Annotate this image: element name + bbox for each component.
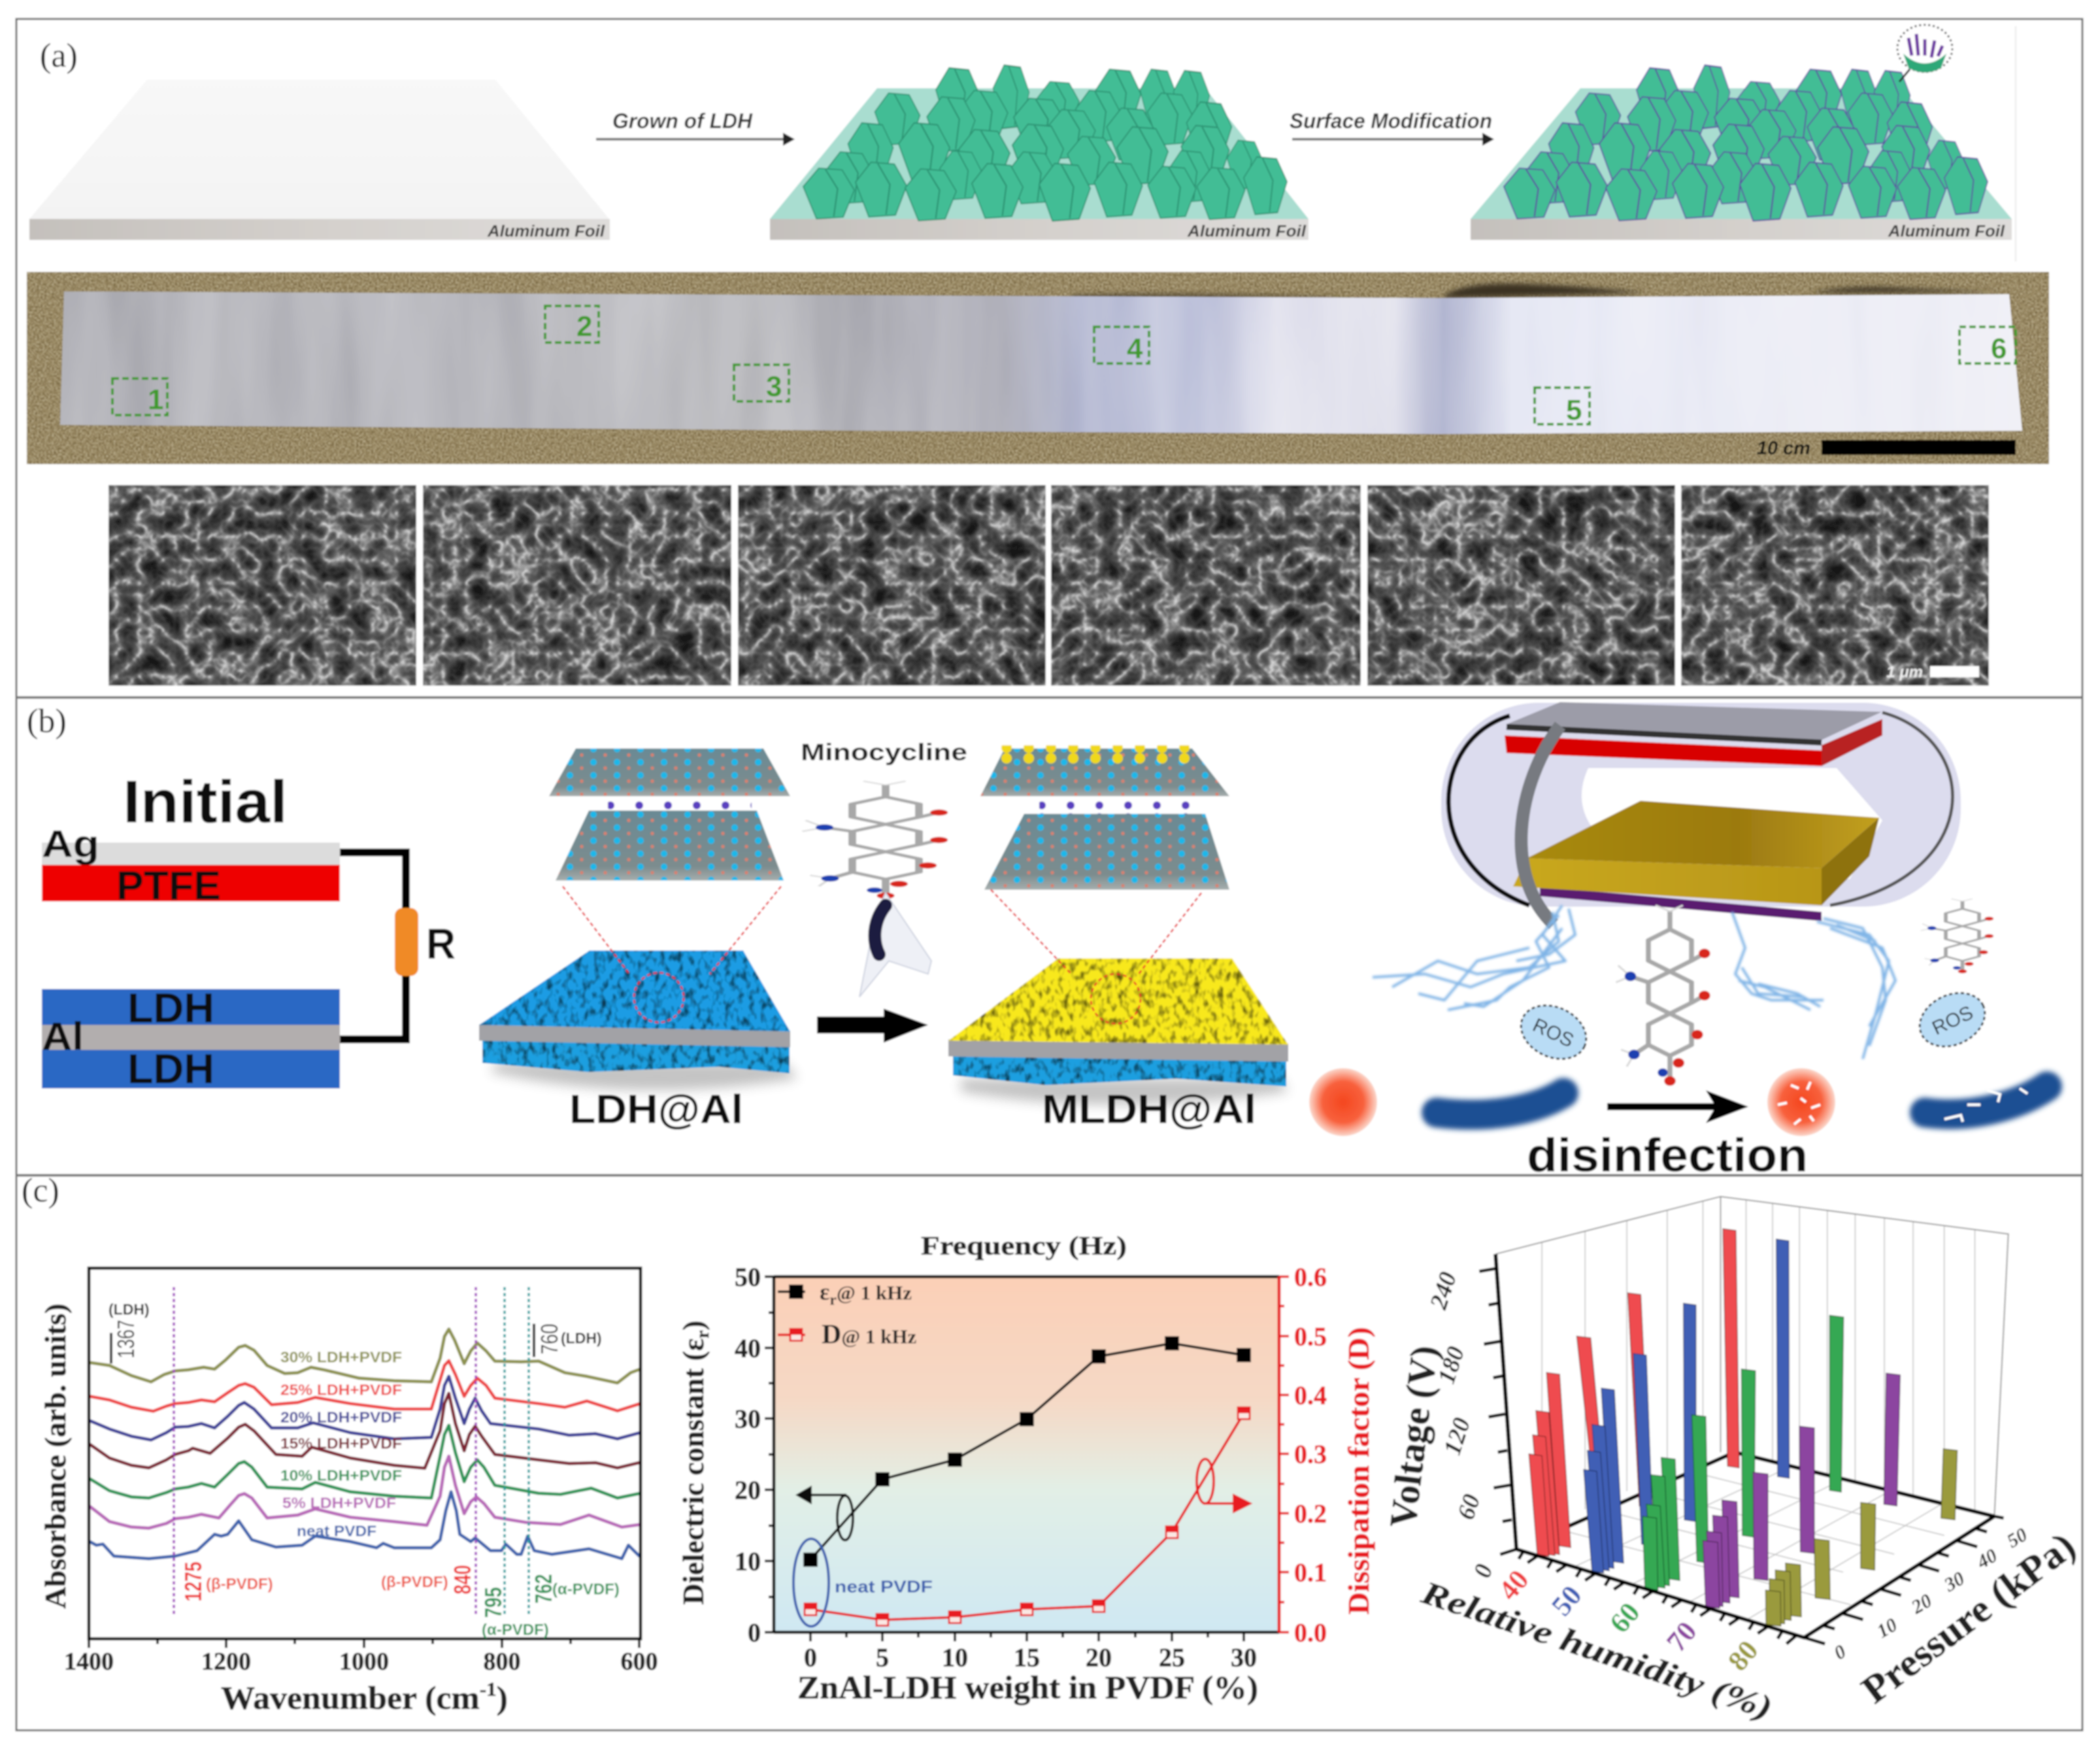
spectra curves [90, 1329, 641, 1558]
central minocycline molecule [1616, 905, 1710, 1086]
panel b: device and disinfection mechanism [27, 702, 2047, 1182]
tick values: 30 [735, 1404, 761, 1434]
sampling box numbers: 1 [148, 384, 163, 416]
right axis tick values: 0.2 [1294, 1499, 1327, 1528]
scale bar 10 cm: 10 cm [1757, 438, 1810, 459]
voltage tick values: 0 [1469, 1561, 1498, 1581]
tick values: 30 [1231, 1643, 1257, 1672]
arrow: grown of LDH: Grown of LDH [612, 109, 753, 133]
gold plate [1513, 801, 1879, 921]
band annotations: 1367 [112, 1320, 139, 1358]
sampling box numbers: 5 [1566, 394, 1582, 426]
voltage tick values [1424, 1269, 1498, 1581]
series labels: 5% LDH+PVDF [282, 1494, 396, 1511]
voltage tick values: 180 [1433, 1343, 1470, 1387]
sampling box 2 [545, 306, 599, 343]
photo: aluminium foil strip on wood [27, 272, 2049, 464]
bars: 40 percent humidity [1529, 1229, 1739, 1556]
ROS bubble right [1911, 983, 1993, 1056]
diagram: triboelectric layer stack and circuit [42, 823, 456, 1092]
right axis tick values: 0.5 [1294, 1322, 1327, 1351]
legend: @ 1 kHz [837, 1281, 912, 1304]
ROS bubble right: ROS [1929, 1002, 1976, 1039]
zoom lines and region [563, 886, 781, 1022]
band annotations: 760 [536, 1324, 563, 1354]
label: LDH at Al: LDH@Al [569, 1087, 743, 1132]
left axis label: r [693, 1330, 713, 1338]
bars: 50 percent humidity [1584, 1239, 1790, 1573]
right axis tick values: 0.4 [1294, 1381, 1327, 1410]
schematic: foil with modified crystals [1471, 26, 2016, 261]
series: dielectric constant [803, 1336, 1251, 1567]
band annotations: (LDH) [561, 1330, 602, 1347]
arrow: surface modification: Surface Modification [1290, 109, 1492, 133]
panel label c: (c) [22, 1172, 59, 1209]
band annotations: (β-PVDF) [206, 1575, 273, 1593]
label: Minocycline: Minocycline [801, 739, 967, 765]
left axis label: Dielectric constant (ε [676, 1335, 710, 1605]
voltage tick values: 120 [1439, 1415, 1476, 1458]
axis labels and tick values [39, 1303, 658, 1716]
axis labels and tick values: ) [497, 1679, 508, 1716]
LDH at Al block [479, 886, 797, 1090]
intact rod bacterium [1437, 1093, 1563, 1115]
minocycline molecule [803, 781, 948, 899]
voltage tick values: 240 [1424, 1269, 1462, 1313]
pressure tick values [1831, 1524, 2031, 1664]
humidity axis label: Relative humidity (%) [1416, 1573, 1777, 1726]
tick values: 0 [804, 1643, 817, 1672]
scale bar 1 micron: 1 μm [1886, 663, 1923, 681]
series labels: 10% LDH+PVDF [280, 1467, 402, 1484]
SEM micrographs [108, 485, 1989, 686]
axis labels and tick values: 1400 [64, 1648, 114, 1675]
sampling box numbers: 3 [766, 371, 782, 403]
ROS bubble left: ROS [1529, 1015, 1577, 1052]
tick values: 20 [1086, 1643, 1112, 1672]
scale bar 1 micron [1886, 663, 1979, 681]
top plate [1505, 702, 1882, 766]
band guide lines [174, 1287, 529, 1614]
panel label a: (a) [40, 37, 78, 75]
tick values: 15 [1014, 1643, 1040, 1672]
arrow: disinfection [1607, 1090, 1748, 1123]
bars: 80 percent humidity [1765, 1449, 1958, 1626]
voltage tick values: 60 [1452, 1491, 1486, 1523]
label: disinfection: disinfection [1527, 1130, 1808, 1182]
series labels: 30% LDH+PVDF [280, 1349, 402, 1366]
chart: FTIR absorbance spectra [39, 1268, 658, 1716]
x axis label: ZnAl-LDH weight in PVDF (%) [797, 1669, 1258, 1705]
diagram: triboelectric layer stack and circuit: R [426, 919, 456, 967]
sampling box 3 [734, 365, 789, 401]
intact coccus [1309, 1068, 1377, 1136]
right axis tick values: 0.6 [1294, 1262, 1327, 1292]
humidity tick values: 60 [1603, 1596, 1646, 1639]
tick values [735, 1262, 1257, 1672]
label: MLDH at Al: MLDH@Al [1042, 1087, 1256, 1132]
sampling box 5 [1535, 388, 1590, 424]
series: dissipation factor [805, 1407, 1250, 1626]
diagram: triboelectric layer stack and circuit: PTFE [116, 864, 221, 909]
chart: 3D bar chart voltage vs humidity and pressure [1381, 1196, 2083, 1726]
panel a: aluminium foil growth and characterisation [27, 25, 2049, 686]
pressure tick values: 20 [1907, 1590, 1935, 1619]
arrow: left axis indicator [798, 1488, 853, 1540]
band annotations: (LDH) [108, 1301, 150, 1318]
callout: neat PVDF [793, 1539, 933, 1626]
diagram: triboelectric layer stack and circuit: LDH [127, 1045, 214, 1092]
series labels [280, 1349, 402, 1539]
tick values: 20 [735, 1475, 761, 1505]
sampling box numbers: 4 [1127, 333, 1143, 365]
bars: 60 percent humidity [1642, 1315, 1844, 1590]
heading: Initial: Initial [123, 769, 288, 835]
tick values: 25 [1159, 1643, 1185, 1672]
sampling box 1 [112, 378, 167, 415]
scale bar 10 cm [1757, 438, 2016, 459]
band annotations: 762 [530, 1574, 557, 1603]
pressure tick values: 50 [2003, 1524, 2031, 1553]
LDH lattice layers, modified [980, 745, 1229, 890]
sampling box 4 [1094, 327, 1149, 363]
right axis label: Dissipation factor (D) [1342, 1327, 1375, 1615]
schematic: foil with LDH crystals: Aluminum Foil [1187, 222, 1307, 241]
diagram: triboelectric layer stack and circuit: LDH [127, 984, 214, 1032]
humidity tick values: 50 [1545, 1579, 1588, 1622]
axis labels and tick values: 1000 [339, 1648, 389, 1675]
right axis tick values: 0.0 [1294, 1618, 1327, 1647]
tick values: 50 [735, 1262, 761, 1292]
icon: magnified crystal inset [1897, 25, 1952, 82]
discharge lightning [1373, 905, 1895, 1059]
axis labels and tick values: Wavenumber (cm [221, 1679, 470, 1716]
sampling box numbers: 6 [1991, 333, 2007, 365]
legend: ε [820, 1279, 829, 1305]
zoom lines and region [991, 890, 1201, 1024]
panel label b: (b) [27, 703, 67, 740]
diagram: triboelectric layer stack and circuit: Al [42, 1015, 84, 1058]
arrow: LDH to MLDH [817, 1009, 928, 1043]
axes and ticks [765, 1277, 1289, 1641]
sampling box 6 [1959, 327, 2016, 363]
band annotations: 840 [449, 1565, 476, 1594]
humidity tick values: 70 [1660, 1615, 1703, 1658]
callout: neat PVDF: neat PVDF [835, 1577, 933, 1596]
arrow: right axis indicator [1197, 1459, 1250, 1511]
axis labels and tick values: Absorbance (arb. units) [39, 1303, 72, 1609]
pressure axis label: Pressure (kPa) [1854, 1524, 2083, 1711]
humidity tick values [1492, 1564, 1765, 1677]
ROS bubble left [1512, 996, 1595, 1069]
axis labels and tick values: 1200 [201, 1648, 251, 1675]
band annotations: (α-PVDF) [552, 1581, 620, 1598]
plot background [774, 1277, 1279, 1632]
panel c: characterisation charts [22, 1172, 2083, 1726]
damaged rod bacterium [1925, 1086, 2047, 1122]
schematic: plain aluminum foil: Aluminum Foil [487, 222, 605, 241]
sampling box numbers: 2 [576, 311, 592, 343]
schematic: foil with LDH crystals [770, 65, 1308, 241]
pressure tick values: 40 [1973, 1545, 2001, 1573]
left axis label: ) [676, 1320, 710, 1330]
heading: frequency: Frequency (Hz) [921, 1231, 1127, 1260]
legend: D@ 1 kHz [822, 1320, 917, 1350]
voltage axis label: Voltage (V) [1381, 1343, 1446, 1530]
series labels: 25% LDH+PVDF [280, 1381, 402, 1398]
TENG device with ring spring [1441, 702, 1961, 924]
tick values: 40 [735, 1334, 761, 1363]
plot frame and ticks [89, 1268, 641, 1648]
pressure tick values: 10 [1873, 1614, 1901, 1643]
series labels: 20% LDH+PVDF [280, 1409, 402, 1426]
legend: r [829, 1292, 837, 1309]
axis labels and tick values: -1 [480, 1679, 497, 1700]
bars: 70 percent humidity [1703, 1373, 1900, 1608]
chart: dielectric constant and dissipation factor [676, 1231, 1375, 1705]
3D front axes and ticks [1479, 1254, 2004, 1644]
tick values: 0 [748, 1618, 761, 1647]
small minocycline molecule [1921, 899, 1993, 973]
tick values: 5 [876, 1643, 889, 1672]
3D walls and floor grid [1495, 1196, 2008, 1620]
schematic: plain aluminum foil [29, 80, 610, 241]
axis labels and tick values: 600 [621, 1648, 658, 1675]
tick values: 10 [942, 1643, 968, 1672]
pressure tick values: 0 [1831, 1641, 1850, 1664]
sampling box numbers [148, 311, 2007, 426]
right axis tick values: 0.1 [1294, 1558, 1327, 1587]
band annotations: (β-PVDF) [381, 1573, 448, 1591]
right axis tick values [1294, 1262, 1327, 1647]
humidity tick values: 40 [1492, 1564, 1535, 1606]
tick values: 10 [735, 1547, 761, 1576]
band annotations [108, 1301, 620, 1639]
series labels: 15% LDH+PVDF [280, 1435, 402, 1452]
legend [778, 1279, 917, 1350]
series labels: neat PVDF [297, 1522, 376, 1539]
schematic: foil with modified crystals: Aluminum Foil [1888, 222, 2005, 241]
band annotations: 795 [480, 1587, 507, 1618]
diagram: triboelectric layer stack and circuit: Ag [42, 823, 99, 865]
axis labels and tick values: 800 [484, 1648, 520, 1675]
LDH lattice layers, unmodified [549, 748, 790, 881]
humidity tick values: 80 [1722, 1634, 1765, 1677]
band annotations: (α-PVDF) [482, 1621, 549, 1639]
band annotations: 1275 [180, 1562, 207, 1602]
arrow: surface modification [1290, 109, 1494, 146]
pressure tick values: 30 [1940, 1568, 1968, 1596]
MLDH at Al block [948, 890, 1288, 1105]
damaged coccus [1767, 1068, 1835, 1136]
icon: gloved hand with syringe [859, 893, 931, 997]
right axis tick values: 0.3 [1294, 1439, 1327, 1469]
arrow: grown of LDH [596, 109, 795, 146]
